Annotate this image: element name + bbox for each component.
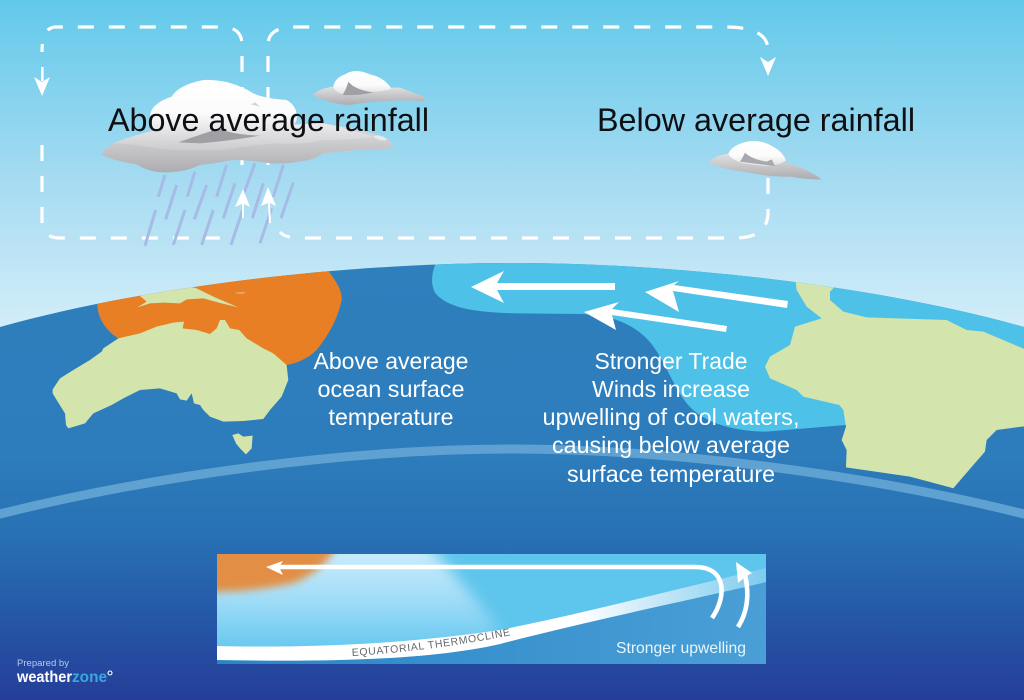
cloud: small right xyxy=(708,141,822,179)
label: stronger trade winds: Stronger Trade xyxy=(594,348,748,374)
land: South America xyxy=(765,277,1024,488)
label: stronger trade winds: causing below average xyxy=(552,432,790,458)
arrow: top left xyxy=(471,271,615,303)
label: stronger trade winds: upwelling of cool waters, xyxy=(542,404,800,430)
warm pool xyxy=(217,554,340,598)
label: stronger trade winds: surface temperature xyxy=(567,461,775,487)
land: small island xyxy=(235,292,246,294)
land: Australia xyxy=(53,320,288,428)
logo: weatherzone: Prepared by xyxy=(17,658,69,669)
thermocline band xyxy=(217,568,766,661)
region: cool water xyxy=(432,263,1024,432)
label: stronger upwelling: Stronger upwelling xyxy=(616,640,746,657)
deep water xyxy=(217,582,766,664)
label: stronger trade winds: Winds increase xyxy=(592,376,750,402)
heading: below average rainfall: Below average rainfall xyxy=(597,102,915,138)
arrow: lower xyxy=(584,302,727,332)
arrow: surface current xyxy=(266,561,722,618)
arrow: top right xyxy=(645,281,788,312)
logo: weatherzone xyxy=(16,658,112,686)
logo: weatherzone: zone xyxy=(72,669,107,686)
label: ocean surface temperature: ocean surface xyxy=(318,376,464,402)
label: ocean surface temperature: Above average xyxy=(314,348,468,374)
panel: ocean cross-section xyxy=(217,554,766,664)
ocean globe xyxy=(0,263,1024,700)
label: ocean surface temperature xyxy=(314,348,468,430)
arrows: rising air xyxy=(235,187,276,223)
label: stronger trade winds xyxy=(542,348,800,487)
region: warm water xyxy=(97,271,342,365)
arrow: circulation down left xyxy=(34,67,50,96)
light water zones xyxy=(217,554,500,646)
sky background xyxy=(0,0,1024,340)
equator band xyxy=(0,449,1024,519)
heading: above average rainfall: Above average rainfall xyxy=(108,102,429,138)
map: warm and cool ocean regions with land xyxy=(52,263,1024,488)
land: New Guinea xyxy=(138,287,238,308)
trade wind arrows xyxy=(471,271,788,332)
circulation dashed loops xyxy=(42,27,768,238)
land: Tasmania xyxy=(232,433,253,454)
logo: weatherzone: weather xyxy=(16,669,72,686)
cloud: large rain cloud xyxy=(102,80,393,172)
arrow: circulation down right xyxy=(760,57,776,76)
thermocline label: EQUATORIAL THERMOCLINE xyxy=(352,628,510,658)
cloud: small upper xyxy=(313,71,427,105)
arrow: upwelling xyxy=(736,562,752,627)
rain xyxy=(145,163,293,246)
label: ocean surface temperature: temperature xyxy=(328,404,454,430)
